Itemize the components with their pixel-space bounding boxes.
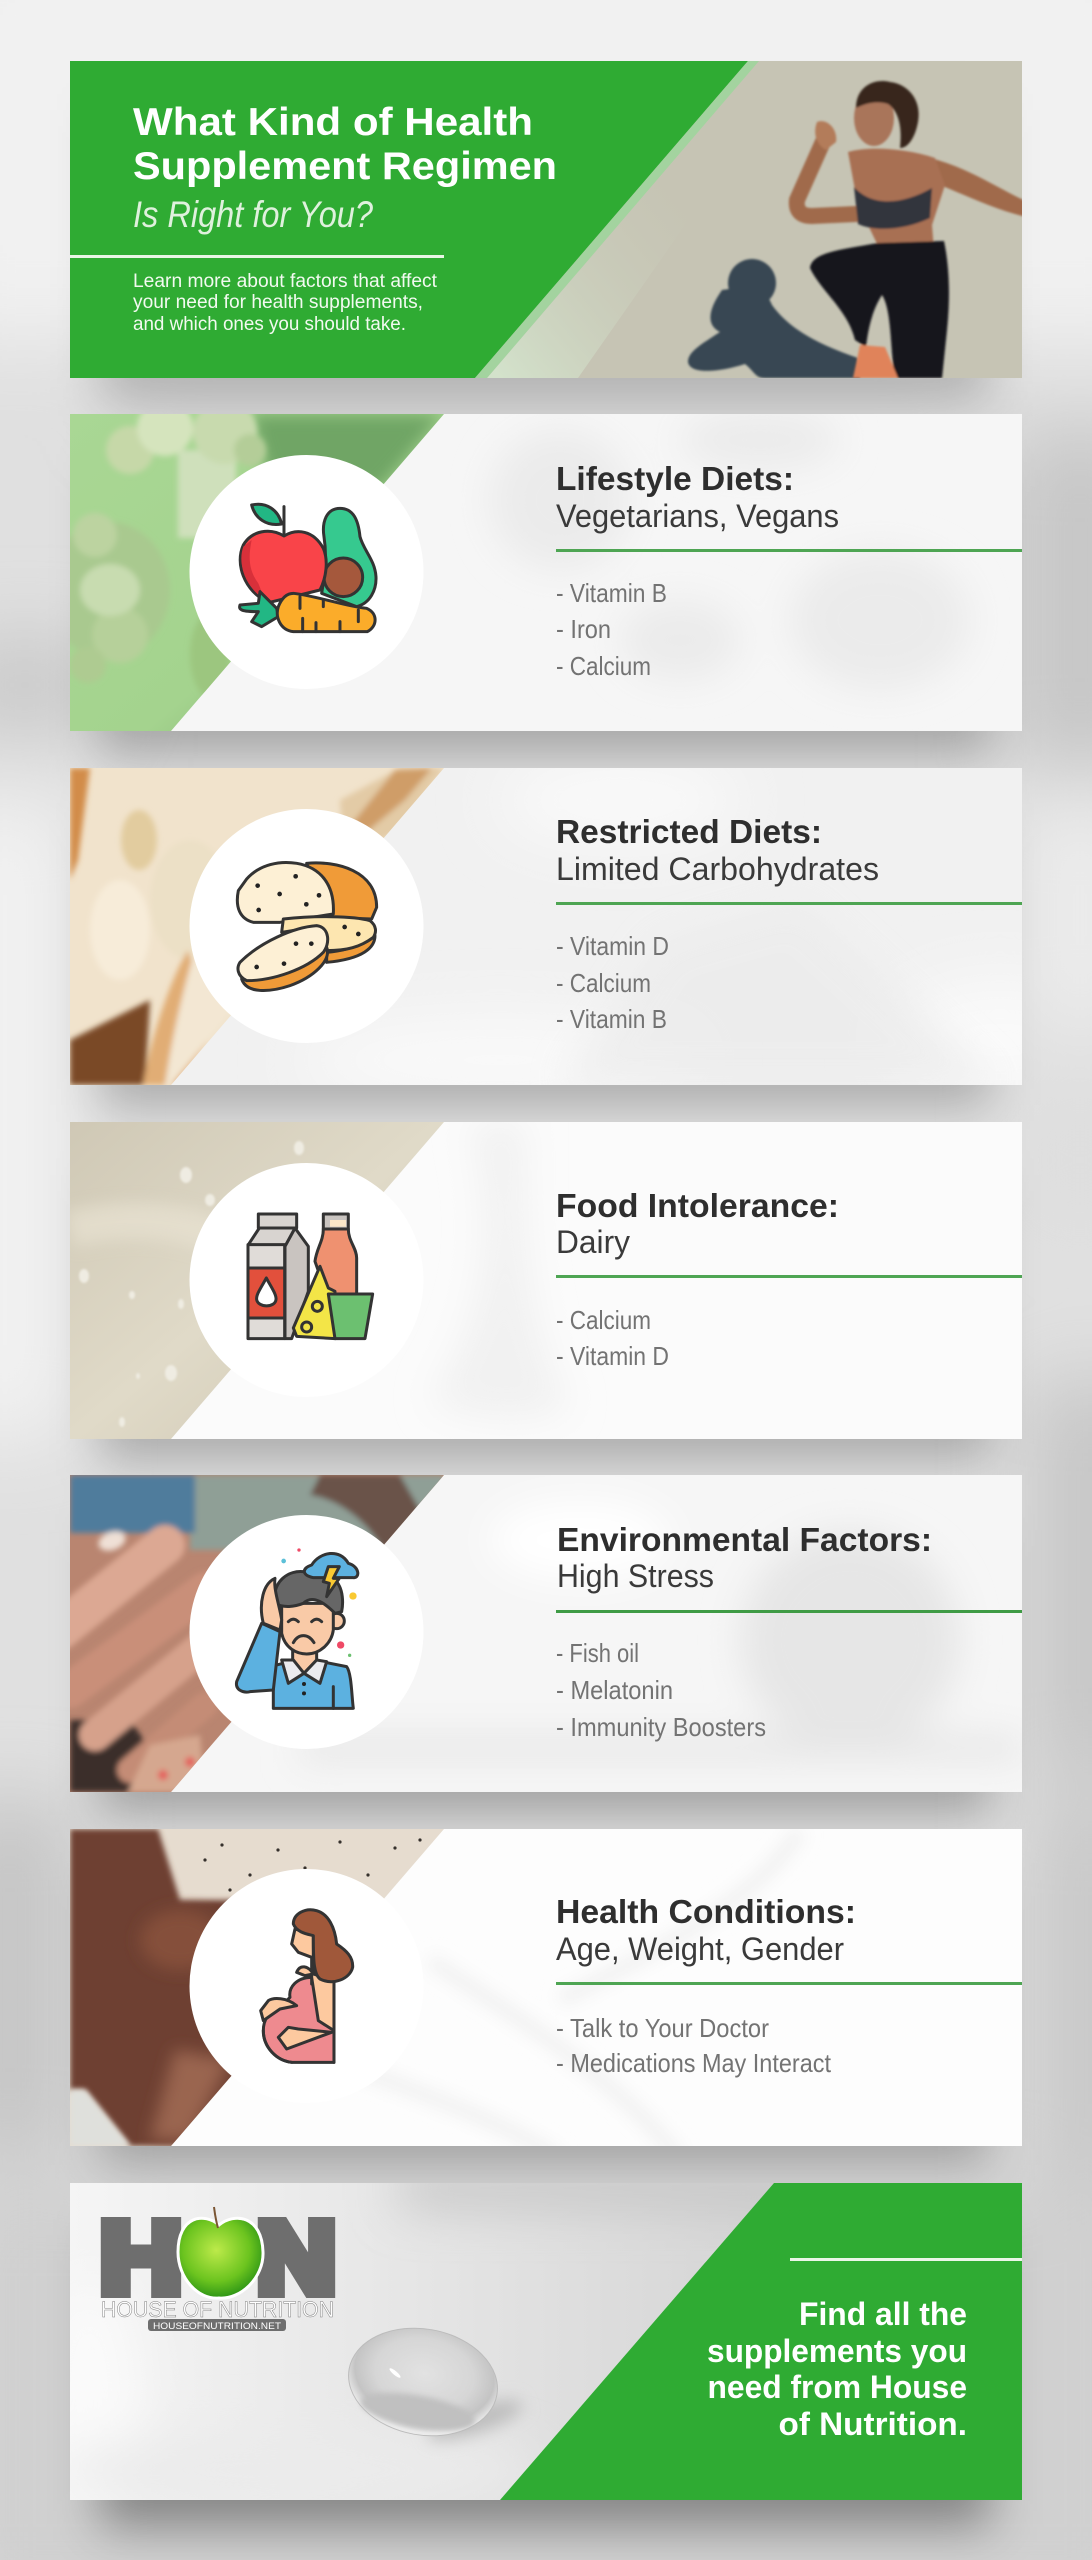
intro text <box>133 271 438 335</box>
supplement list: - Melatonin <box>556 1675 673 1705</box>
call to action text: of Nutrition. <box>778 2406 967 2442</box>
supplement list: - Calcium <box>556 968 651 998</box>
shadow of athlete <box>688 259 860 378</box>
supplement list <box>556 1638 766 1742</box>
title heading: Supplement Regimen <box>133 145 557 188</box>
panel texture <box>70 1475 1022 1792</box>
logo: House of Nutrition <box>100 2202 336 2332</box>
icon: stressed man <box>236 1548 358 1708</box>
supplement list <box>556 578 667 681</box>
panel texture <box>70 1122 1022 1439</box>
photo: capsule on grey <box>40 2170 1022 2520</box>
supplement list: - Calcium <box>556 1305 651 1335</box>
icon: dairy products <box>248 1214 373 1339</box>
green corner <box>500 2183 1022 2500</box>
supplement list: - Calcium <box>556 651 651 681</box>
supplement list: - Medications May Interact <box>556 2048 832 2078</box>
intro text: your need for health supplements, <box>133 292 423 313</box>
supplement list: - Vitamin B <box>556 1004 667 1034</box>
heading: Restricted Diets: <box>556 813 822 850</box>
icon: pregnant woman <box>261 1910 353 2062</box>
green rule <box>556 1275 1022 1278</box>
panel: restricted diets <box>70 768 1022 1085</box>
panel texture <box>171 414 1022 731</box>
logo: House of Nutrition: N <box>257 2202 336 2314</box>
supplement list: - Talk to Your Doctor <box>556 2013 769 2043</box>
supplement list <box>556 931 669 1034</box>
logo: House of Nutrition: HOUSEOFNUTRITION.NET <box>153 2321 281 2332</box>
photo: milk swirl <box>70 1122 444 1439</box>
circle badge <box>190 455 424 689</box>
panel: health conditions <box>70 1829 1022 2160</box>
logo: House of Nutrition: H <box>100 2202 182 2314</box>
green field <box>70 61 748 378</box>
photo: athlete on concrete <box>480 61 1030 378</box>
subheading: Vegetarians, Vegans <box>556 498 839 534</box>
panel: lifestyle diets <box>46 400 1022 731</box>
circle badge <box>190 1163 424 1397</box>
panel: environmental factors <box>60 1475 1022 1792</box>
photo: cauliflower on green <box>70 414 444 731</box>
green rule <box>556 1610 1022 1613</box>
circle badge <box>190 1869 424 2103</box>
subheading: Dairy <box>556 1224 630 1260</box>
call to action text: Find all the <box>799 2296 967 2332</box>
logo: House of Nutrition: HOUSE OF NUTRITION <box>101 2297 334 2322</box>
title tagline: Is Right for You? <box>133 194 373 235</box>
photo: clasped hands <box>60 1475 444 1792</box>
green rule <box>556 902 1022 905</box>
supplement list: - Fish oil <box>556 1638 639 1668</box>
supplement list: - Vitamin D <box>556 1341 669 1371</box>
panel: title banner <box>70 61 1030 378</box>
title rule <box>70 255 444 258</box>
panel texture <box>70 1829 1022 2160</box>
intro text: and which ones you should take. <box>133 314 406 335</box>
call to action text: supplements you <box>707 2333 967 2369</box>
intro text: Learn more about factors that affect <box>133 271 438 292</box>
icon: apple, avocado and carrot <box>240 504 376 632</box>
photo: pregnant belly <box>70 1829 444 2146</box>
subheading: High Stress <box>557 1558 714 1594</box>
call to action text <box>707 2296 967 2442</box>
heading: Lifestyle Diets: <box>556 460 794 497</box>
call to action text: need from House <box>708 2369 967 2405</box>
supplement list <box>556 1305 669 1371</box>
supplement list: - Vitamin B <box>556 578 667 608</box>
photo: bread slices <box>70 768 444 1085</box>
panel: food intolerance <box>70 1122 1022 1439</box>
heading: Food Intolerance: <box>556 1187 839 1224</box>
green rule <box>556 549 1022 552</box>
circle badge <box>190 1515 424 1749</box>
panel: call to action <box>40 2170 1022 2520</box>
heading: Health Conditions: <box>556 1893 856 1930</box>
subheading: Age, Weight, Gender <box>556 1931 844 1967</box>
title heading <box>133 101 557 188</box>
title heading: What Kind of Health <box>133 101 533 144</box>
supplement list: - Iron <box>556 614 611 644</box>
supplement list: - Vitamin D <box>556 931 669 961</box>
athlete figure <box>797 81 1030 378</box>
circle badge <box>190 809 424 1043</box>
pale band <box>475 61 759 378</box>
green rule <box>556 1982 1022 1985</box>
supplement list <box>556 2013 832 2078</box>
icon: bread loaf <box>237 862 377 991</box>
subheading: Limited Carbohydrates <box>556 851 879 887</box>
panel texture <box>171 768 1022 1085</box>
panel drop shadows <box>100 110 990 2527</box>
white rule <box>790 2258 1022 2261</box>
supplement list: - Immunity Boosters <box>556 1712 766 1742</box>
heading: Environmental Factors: <box>557 1521 932 1558</box>
